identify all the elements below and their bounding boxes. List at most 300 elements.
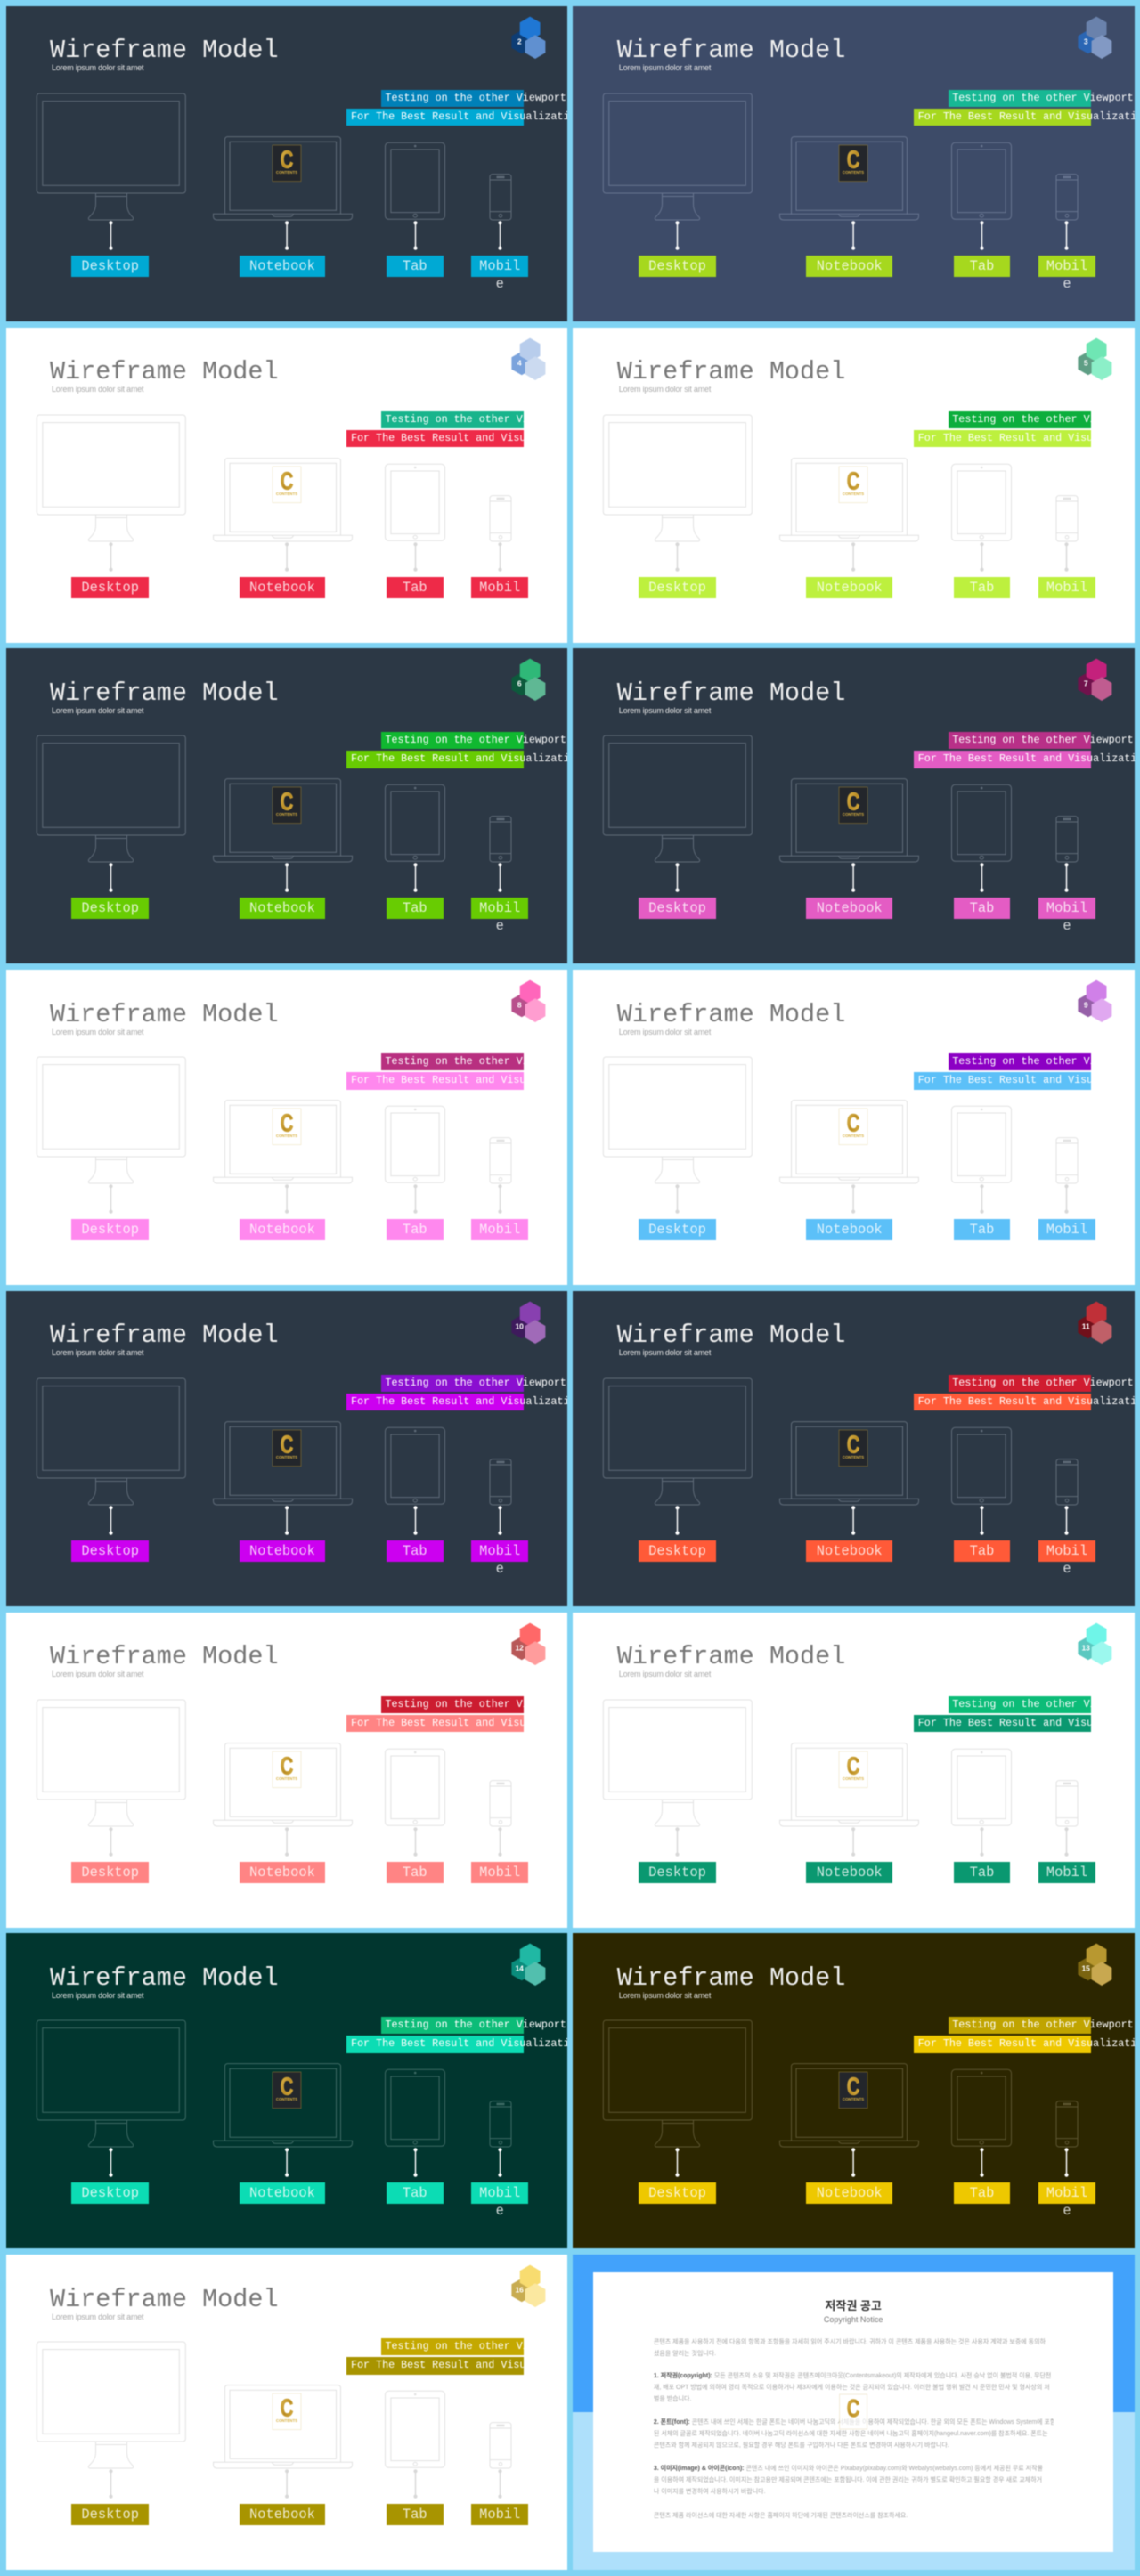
subtitle: Lorem ipsum dolor sit amet [52,2312,143,2321]
icon: phone [1056,817,1078,862]
title: Wireframe Model [50,36,279,65]
label: mobile [1038,577,1095,598]
icon: notebook [780,136,919,220]
connector: desktop [676,864,679,891]
label: mobile: Mobile [1046,2185,1087,2219]
icon: notebook [780,1101,919,1183]
label: desktop [71,898,149,919]
logo overlay [839,2393,867,2430]
label: tab: Tab [403,579,428,595]
device wireframes with badge [602,1622,1112,1857]
label: desktop: Desktop [81,2507,139,2523]
banner: testing: Testing on the other Viewport [952,92,1134,104]
label: notebook: Notebook [817,258,883,274]
logo: CONTENTS [843,2097,864,2101]
connector: tab [413,864,417,891]
logo overlay: C [847,2395,860,2423]
label: notebook: Notebook [249,579,315,595]
clause 3 image and icon: 나 이미지를 변경하여 사용하시기 바랍니다. [654,2489,766,2495]
label: desktop [71,1540,149,1562]
label: tab [387,2182,444,2204]
label: mobile [1038,1540,1095,1562]
connector: mobile [498,2470,501,2498]
connector: desktop [109,221,112,249]
label: mobile: Mobile [479,258,520,292]
connector: mobile [1065,542,1068,571]
label: notebook: Notebook [817,579,883,595]
hexagon page badge [1079,659,1112,701]
label: notebook [240,1861,325,1882]
title: Wireframe Model [50,679,279,708]
logo: CONTENTS [275,1455,297,1459]
icon: notebook [213,1743,352,1825]
intro paragraph: 콘텐츠 제품을 사용하기 전에 다음의 항목과 조항들을 자세히 읽어 주시기 바랍니다. 귀하가 이 콘텐츠 제품을 사용하는 것은 사용자 계약과 보증에 동의하 [654,2338,1046,2345]
panel: slide 11 [573,1291,1135,1606]
label: desktop [71,1861,149,1882]
connector: tab [981,864,983,891]
banner: testing: Testing on the other Viewport [952,1697,1134,1710]
connector: mobile [498,1185,501,1213]
clause 1 copyright: 1. 저작권(copyright): 모든 콘텐츠의 소유 및 저작권은 콘텐츠메이크아웃(Contentsmakeout)의 제작자에게 있습니다. 사전 승낙 없이 불법적 이용, 무단전 [654,2373,1051,2379]
label: notebook [240,256,325,277]
connector: mobile [1065,2149,1068,2176]
label: tab: Tab [970,1543,994,1559]
logo: CONTENTS [275,1134,297,1138]
label: tab: Tab [970,1865,994,1881]
hexagon page badge: 3 [1084,37,1088,45]
connector: tab [413,1185,417,1213]
panel: copyright notice [573,2255,1135,2570]
connector: mobile [498,864,501,891]
title: Wireframe Model [617,1963,845,1993]
panel: slide 3 [573,6,1135,321]
label: mobile: Mobile [1046,579,1087,613]
title: Wireframe Model [50,2285,279,2314]
panel: slide 6 [5,648,567,963]
label: desktop [71,2182,149,2204]
logo: CONTENTS [275,170,297,175]
device wireframes with badge [602,979,1112,1214]
icon: tablet [952,464,1012,540]
icon: tablet [385,784,444,861]
icon: desktop monitor [604,93,753,220]
banner: testing [949,1375,1091,1392]
label: desktop: Desktop [81,579,139,595]
subtitle: Lorem ipsum dolor sit amet [52,1991,143,2000]
icon: phone [490,1459,511,1505]
icon: phone [1056,174,1078,220]
device wireframes with badge [36,1622,546,1857]
logo: CONTENTS [843,170,864,175]
banner: testing [381,2338,524,2355]
icon: desktop monitor [604,415,753,541]
banner: best result [346,1715,524,1732]
logo: C [847,1752,860,1780]
banner: best result [914,2036,1091,2053]
label: notebook [240,2182,325,2204]
hexagon page badge: 14 [515,1964,524,1973]
icon: phone [1056,495,1078,541]
label: notebook [240,2504,325,2525]
label: notebook [240,577,325,598]
icon: notebook [213,136,352,220]
panel: slide 14 [5,1933,567,2248]
banner: best result [914,1394,1091,1410]
logo [273,1430,301,1466]
logo: C [847,1110,860,1138]
icon: tablet [952,1106,1012,1182]
logo: CONTENTS [275,492,297,495]
connector: notebook [852,1827,855,1856]
label: mobile [471,256,528,277]
subtitle: Lorem ipsum dolor sit amet [52,706,143,715]
logo: C [847,146,860,174]
label: tab [954,256,1010,277]
clause 1 copyright: 벌을 받습니다. [654,2396,691,2402]
hexagon page badge: 7 [1084,679,1088,687]
connector: desktop [109,864,112,891]
banner: best result [914,1072,1091,1090]
connector: notebook [285,2470,288,2498]
hexagon page badge: 9 [1084,1000,1088,1009]
hexagon page badge [511,337,545,379]
label: desktop: Desktop [648,579,706,595]
clause 3 image and icon [654,2465,1043,2495]
title: Wireframe Model [50,1642,279,1671]
icon: desktop monitor [37,2020,185,2147]
label: tab: Tab [970,579,994,595]
hexagon page badge [511,659,545,701]
label: notebook [806,577,892,598]
banner: testing: Testing on the other Viewport [952,734,1134,746]
logo: C [280,467,293,495]
banner: testing: Testing on the other Viewport [385,2019,566,2031]
label: tab: Tab [403,1543,428,1559]
label: mobile [471,2182,528,2204]
hexagon page badge [1079,16,1112,59]
connector: notebook [285,1185,288,1213]
logo [839,1751,867,1787]
subtitle: Lorem ipsum dolor sit amet [619,706,711,715]
label: desktop [71,1219,149,1240]
device wireframes with badge [36,1943,547,2178]
device wireframes with badge [602,337,1112,572]
icon: desktop monitor [37,735,185,862]
label: desktop [639,898,716,919]
icon: phone [1056,1459,1078,1505]
panel: slide 10 [5,1291,567,1606]
connector: mobile [1065,1185,1068,1213]
icon: tablet [952,784,1012,861]
connector: mobile [1065,1827,1068,1856]
logo [273,787,301,824]
icon: phone [490,174,511,220]
logo: CONTENTS [275,2418,297,2423]
label: mobile [1038,2182,1095,2204]
subtitle: Lorem ipsum dolor sit amet [619,1670,711,1678]
label: tab [387,577,444,598]
label: mobile [471,2504,528,2525]
label: desktop [639,2182,716,2204]
title: Wireframe Model [50,1000,279,1029]
logo: CONTENTS [843,1455,864,1459]
logo: C [280,1110,293,1138]
connector: mobile [498,1827,501,1856]
hexagon page badge: 10 [515,1321,524,1330]
icon: tablet [385,1106,444,1182]
label: notebook: Notebook [249,2185,315,2201]
banner: best result [914,1715,1091,1732]
label: tab: Tab [403,1865,428,1881]
banner: testing [381,1375,524,1392]
label: notebook: Notebook [249,1222,315,1238]
closing note: 콘텐츠 제품 라이선스에 대한 자세한 사항은 홈페이지 하단에 기재된 콘텐츠라이선스를 참조하세요. [654,2513,908,2518]
logo [273,467,301,502]
connector: notebook [852,2149,855,2176]
title: Wireframe Model [617,36,845,65]
icon: notebook [213,2385,352,2468]
banner: best result [914,109,1091,126]
hexagon page badge: 6 [517,679,521,687]
label: notebook [806,1861,892,1882]
label: mobile [471,1219,528,1240]
connector: tab [981,1827,983,1856]
label: notebook [240,1219,325,1240]
panel: slide 16 [5,2255,567,2570]
label: mobile: Mobile [1046,1222,1087,1255]
label: notebook: Notebook [249,1865,315,1881]
title: Wireframe Model [617,679,845,708]
connector: notebook [852,1185,855,1213]
logo [839,467,867,502]
connector: tab [981,1185,983,1213]
logo: C [280,789,293,817]
logo: C [280,2074,293,2101]
device wireframes with badge [602,1943,1113,2178]
subtitle: Lorem ipsum dolor sit amet [52,63,143,72]
connector: notebook [852,221,855,249]
label: tab [387,2504,444,2525]
label: desktop: Desktop [648,1222,706,1238]
hexagon page badge [511,16,545,59]
label: mobile [471,1540,528,1562]
icon: notebook [780,458,919,541]
banner: testing: Testing on the other Viewport [952,2019,1134,2031]
banner: testing [949,1695,1091,1713]
label: notebook: Notebook [249,2507,315,2523]
connector: desktop [109,1827,112,1856]
subtitle: Lorem ipsum dolor sit amet [619,1028,711,1036]
icon: phone [1056,1780,1078,1825]
icon: notebook [213,1421,352,1505]
device wireframes with badge [36,337,546,572]
label: notebook [240,898,325,919]
banner: best result [914,751,1091,768]
icon: phone [1056,1138,1078,1183]
logo: C [847,2074,860,2101]
label: notebook: Notebook [249,258,315,274]
banner: testing: Testing on the other Viewport [385,2340,566,2353]
icon: phone [1056,2101,1078,2147]
connector: desktop [676,1506,679,1534]
hexagon page badge: 11 [1082,1321,1090,1330]
icon: tablet [385,1427,444,1504]
hexagon page badge: 16 [515,2285,524,2294]
title: Wireframe Model [617,1642,845,1671]
banner: testing: Testing on the other Viewport [385,1055,566,1068]
title: Wireframe Model [50,357,279,386]
banner: testing [949,1053,1091,1070]
label: tab [954,1540,1010,1562]
label: notebook [806,2182,892,2204]
clause 2 font: 2. 폰트(font): 콘텐츠 내에 쓰인 서체는 한글 폰트는 네이버 나눔고딕의 서체들을 이용하여 제작되었습니다. 한글 외의 모든 폰트는 Windows System에 포함 [654,2419,1054,2426]
clause 2 font [654,2418,1054,2449]
label: notebook [806,256,892,277]
connector: mobile [498,1506,501,1534]
banner: best result [346,2036,524,2053]
icon: phone [490,1138,511,1183]
banner: best result [914,429,1091,447]
label: tab: Tab [970,900,994,916]
title: Wireframe Model [50,1963,279,1993]
connector: desktop [676,1185,679,1213]
connector: mobile [1065,221,1068,249]
label: tab [954,1861,1010,1882]
label: notebook [240,1540,325,1562]
clause 2 font: 콘텐츠와 함께 제공되지 않으므로, 필요할 경우 해당 폰트를 구입하거나 다른 폰트로 변경하여 사용하시기 바랍니다. [654,2442,949,2449]
connector: desktop [676,2149,679,2176]
icon: notebook [213,458,352,541]
icon: tablet [385,2070,444,2147]
label: tab: Tab [403,2507,428,2523]
label: desktop: Desktop [648,900,706,916]
icon: notebook [213,1101,352,1183]
logo [273,1751,301,1787]
connector: desktop [109,1185,112,1213]
connector: notebook [852,1506,855,1534]
label: desktop: Desktop [648,1865,706,1881]
hexagon page badge: 13 [1082,1643,1090,1652]
hexagon page badge [511,1622,545,1665]
label: desktop: Desktop [648,258,706,274]
banner: testing [949,2017,1091,2034]
banner: testing: Testing on the other Viewport [952,1055,1134,1068]
label: desktop: Desktop [648,2185,706,2201]
hexagon page badge: 5 [1084,358,1088,367]
logo: CONTENTS [843,1776,864,1781]
icon: desktop monitor [37,2342,185,2468]
connector: tab [413,221,417,249]
banner: testing [949,732,1091,749]
panel: slide 9 [573,970,1135,1285]
label: tab [954,1219,1010,1240]
icon: phone [490,2423,511,2468]
subtitle: Lorem ipsum dolor sit amet [52,1670,143,1678]
icon: tablet [952,1427,1012,1504]
label: desktop [71,577,149,598]
connector: desktop [676,542,679,571]
logo: CONTENTS [275,812,297,817]
banner: best result [346,429,524,447]
connector: mobile [1065,864,1068,891]
label: desktop: Desktop [648,1543,706,1559]
banner: testing: Testing on the other Viewport [385,734,566,746]
label: desktop: Desktop [81,2185,139,2201]
hexagon page badge [1079,980,1112,1022]
icon: desktop monitor [37,93,185,220]
banner: testing [381,1053,524,1070]
label: tab: Tab [970,2185,994,2201]
connector: notebook [285,1506,288,1534]
icon: notebook [780,1743,919,1825]
hexagon page badge [1079,1622,1112,1665]
white notice card [593,2272,1113,2552]
hexagon page badge: 12 [515,1643,524,1652]
label: mobile: Mobile [1046,258,1087,292]
label: mobile: Mobile [479,1543,520,1577]
label: tab: Tab [970,1222,994,1238]
icon: tablet [952,142,1012,219]
clause 1 copyright [654,2372,1051,2402]
label: mobile [471,898,528,919]
label: desktop [639,1219,716,1240]
connector: tab [981,542,983,571]
logo: C [280,1431,293,1459]
banner: testing [381,90,524,107]
icon: tablet [385,464,444,540]
title: Wireframe Model [617,357,845,386]
device wireframes with badge [602,1301,1113,1535]
icon: desktop monitor [37,415,185,541]
clause 1 copyright: 재, 배포 OPT 방법에 의하여 영리 목적으로 이용하거나 제3자에게 이용하는 것은 금지되어 있습니다. 이러한 불법 행위 발견 시 준민한 민사 및 형사상의 처 [654,2385,1050,2391]
label: tab: Tab [403,258,428,274]
panel: slide 2 [5,6,567,321]
label: tab: Tab [403,900,428,916]
label: mobile: Mobile [479,1865,520,1898]
logo: C [280,1752,293,1780]
icon: notebook [780,779,919,862]
label: mobile [1038,898,1095,919]
banner: testing: Testing on the other Viewport [385,1697,566,1710]
connector: mobile [498,2149,501,2176]
hexagon page badge [511,2265,545,2307]
title: Wireframe Model [50,1321,279,1350]
label: mobile: Mobile [479,2185,520,2219]
label: tab: Tab [403,2185,428,2201]
label: desktop: Desktop [81,258,139,274]
device wireframes with badge [36,16,547,251]
connector: tab [981,221,983,249]
connector: desktop [109,2149,112,2176]
label: notebook: Notebook [817,900,883,916]
logo: CONTENTS [275,1776,297,1781]
logo [273,145,301,181]
label: mobile: Mobile [1046,1865,1087,1898]
subtitle: Lorem ipsum dolor sit amet [52,1028,143,1036]
label: desktop [71,256,149,277]
notice subheading: Copyright Notice [824,2315,883,2324]
label: tab [387,1219,444,1240]
connector: notebook [285,2149,288,2176]
panel: slide 15 [573,1933,1135,2248]
label: desktop: Desktop [81,1865,139,1881]
intro paragraph: 셨음을 알리는 것입니다. [654,2351,716,2356]
label: mobile: Mobile [479,579,520,613]
icon: notebook [780,1421,919,1505]
banner: testing: Testing on the other Viewport [952,413,1134,426]
subtitle: Lorem ipsum dolor sit amet [52,1348,143,1357]
clause 3 image and icon: 을 이용하여 제작되었습니다. 이미지는 참고용만 제공되며 콘텐츠에는 포함됩니다. 이에 관한 권리는 귀하가 별도로 확인하고 필요할 경우 새로 교체하거 [654,2477,1042,2483]
